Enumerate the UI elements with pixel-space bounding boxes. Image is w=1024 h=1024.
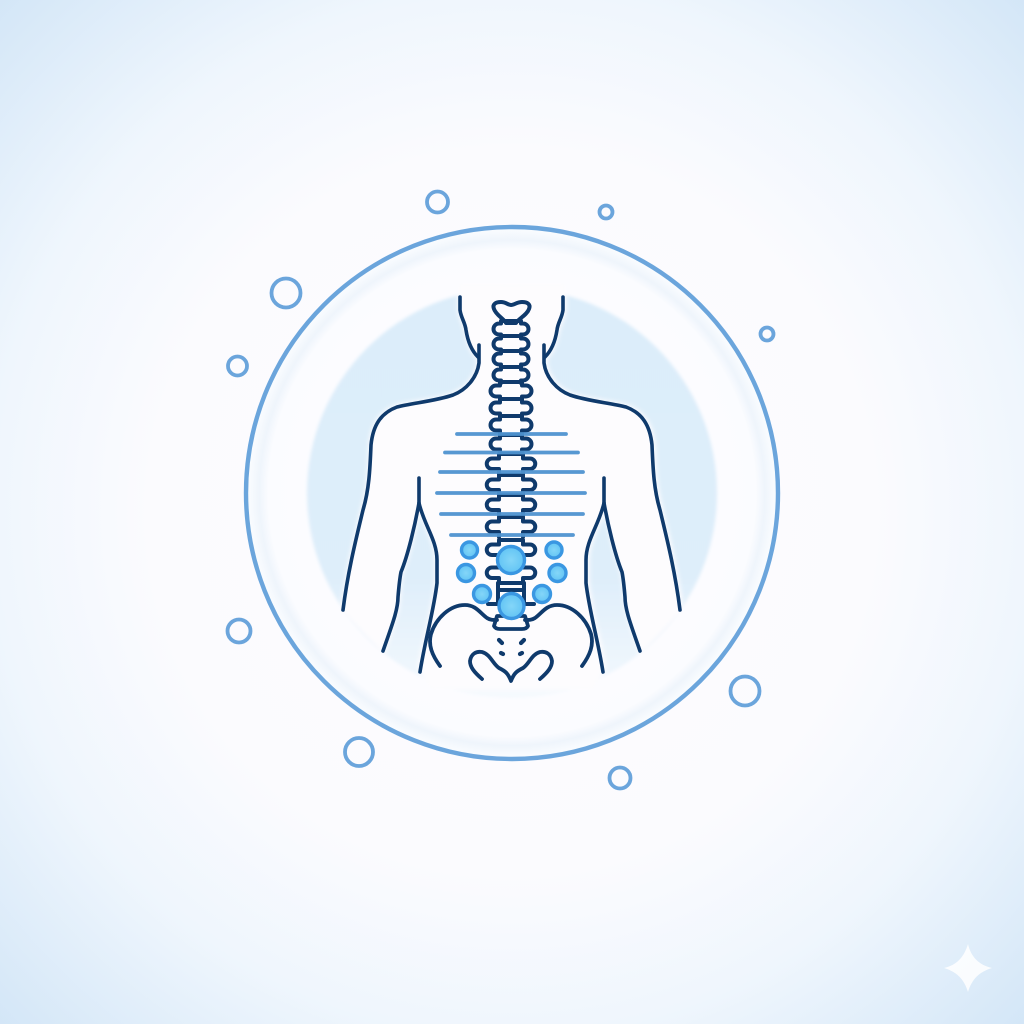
spine	[487, 302, 535, 604]
decorative bubbles	[228, 192, 774, 788]
blue inner disc	[307, 288, 717, 698]
circular medallion	[246, 227, 778, 759]
iliac right	[525, 605, 592, 666]
coccyx and lower pelvis	[470, 652, 552, 681]
pain highlight nodes	[458, 542, 566, 618]
lower lumbar	[488, 583, 534, 604]
icon: sparkle watermark	[944, 944, 992, 992]
atlas vertebra	[493, 302, 530, 323]
body outline	[343, 297, 680, 672]
sacrum	[494, 616, 528, 629]
body fill	[343, 285, 681, 688]
iliac left	[430, 605, 497, 666]
rib lines	[437, 434, 585, 535]
sacral foramina	[499, 640, 524, 654]
pelvis	[430, 605, 592, 681]
human back figure	[343, 285, 681, 688]
